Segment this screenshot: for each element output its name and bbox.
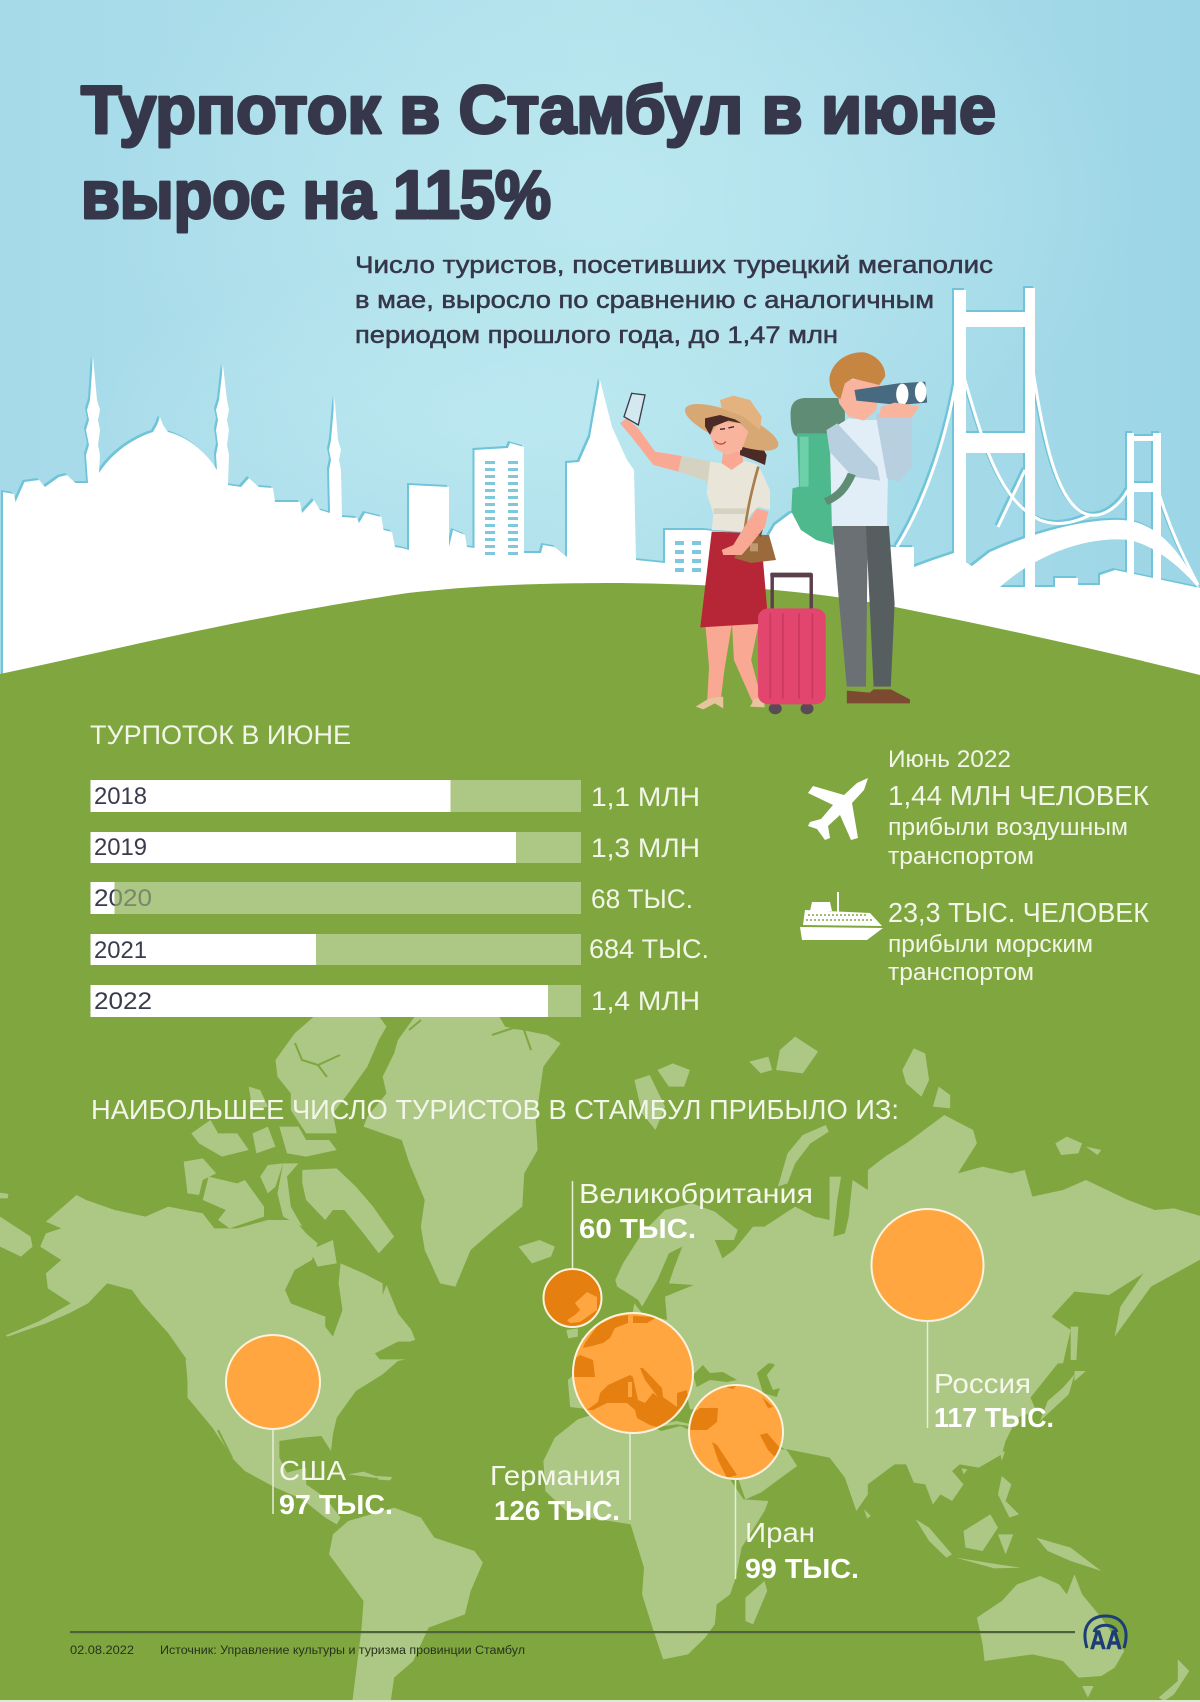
bar 2018 [90,780,700,812]
title [81,72,996,233]
label: Iran [736,1479,859,1584]
air arrivals: 1,44 МЛН ЧЕЛОВЕК [888,780,1150,811]
green hill background [0,583,1200,1702]
title: вырос на 115% [81,157,551,233]
subtitle: периодом прошлого года, до 1,47 млн [355,322,838,349]
subtitle: в мае, выросло по сравнению с аналогичным [355,287,934,314]
tourists illustration [620,352,927,714]
bar 2018: 2018 [94,783,147,810]
bar 2020 [90,882,693,914]
footer page edge [0,1700,1200,1702]
woman upper body with hat and phone [620,393,784,563]
label: Iran: 99 ТЫС. [745,1553,859,1584]
bar 2020: 2020 [94,885,152,912]
seas seen through circles [567,1292,780,1478]
air arrivals: транспортом [888,843,1034,870]
title: Турпоток в Стамбул в июне [81,72,996,148]
tourist man [791,352,927,703]
label: Germany [490,1433,630,1526]
footer: 02.08.2022 [70,1645,134,1657]
bar 2021 [90,934,709,965]
label: Russia: Россия [934,1368,1031,1399]
bridge [897,288,1200,590]
footer: Источник: Управление культуры и туризма провинции Стамбул [160,1645,525,1657]
mosque and towers silhouette [3,357,1200,720]
footer [70,1631,1075,1657]
sky background [0,0,1200,720]
logo: AA: AA [1090,1625,1122,1655]
bar 2022: 2022 [94,988,152,1015]
arctic fjords and coast details [218,1020,535,1458]
label: Germany: Германия [490,1460,621,1491]
bar chart: tourist flow by year [90,780,709,1017]
sea arrivals: транспортом [888,959,1034,986]
label: Iran: Иран [745,1517,815,1548]
sea arrivals: прибыли морским [888,931,1093,958]
bar 2019: 1,3 МЛН [591,833,700,863]
sea arrivals: 23,3 ТЫС. ЧЕЛОВЕК [888,897,1150,928]
suitcase [758,573,826,714]
label: UK [572,1178,813,1269]
sea arrivals [888,897,1150,986]
label: UK: Великобритания [579,1178,813,1209]
label: USA: 97 ТЫС. [279,1489,393,1520]
circle fills [226,1209,984,1479]
label: Russia [928,1320,1054,1433]
section heading: June tourist flow: ТУРПОТОК В ИЮНЕ [90,720,351,750]
Istanbul skyline with bridge [3,288,1200,720]
suitcase and man and woman lower body [696,352,927,714]
world map [0,1013,1200,1702]
date label: Июнь 2022 [888,746,1011,773]
icon: plane [808,778,868,840]
subtitle [355,252,993,349]
bar 2021: 2021 [94,937,147,964]
label: UK: 60 ТЫС. [579,1213,696,1244]
bar 2021: 684 ТЫС. [589,934,709,964]
transport arrivals panel [800,746,1150,986]
bar 2019 [90,832,700,863]
subtitle: Число туристов, посетивших турецкий мегаполис [355,252,993,279]
bar 2022: 1,4 МЛН [591,986,700,1016]
building windows [485,461,701,572]
bar 2019: 2019 [94,834,147,861]
label: Russia: 117 ТЫС. [934,1402,1054,1433]
bar 2022 [90,985,700,1017]
air arrivals [888,780,1150,870]
label: Germany: 126 ТЫС. [494,1495,620,1526]
label: USA: США [279,1455,346,1486]
map heading: НАИБОЛЬШЕЕ ЧИСЛО ТУРИСТОВ В СТАМБУЛ ПРИБЫЛО ИЗ: [91,1094,899,1125]
air arrivals: прибыли воздушным [888,814,1128,841]
icon: ship [800,892,883,940]
country circles [226,1209,984,1479]
woman legs and skirt [696,532,768,709]
bar 2020: 68 ТЫС. [591,884,693,914]
label: USA [273,1429,393,1520]
circle outlines [226,1209,984,1479]
bar 2018: 1,1 МЛН [591,782,700,812]
logo: AA [1085,1616,1126,1655]
